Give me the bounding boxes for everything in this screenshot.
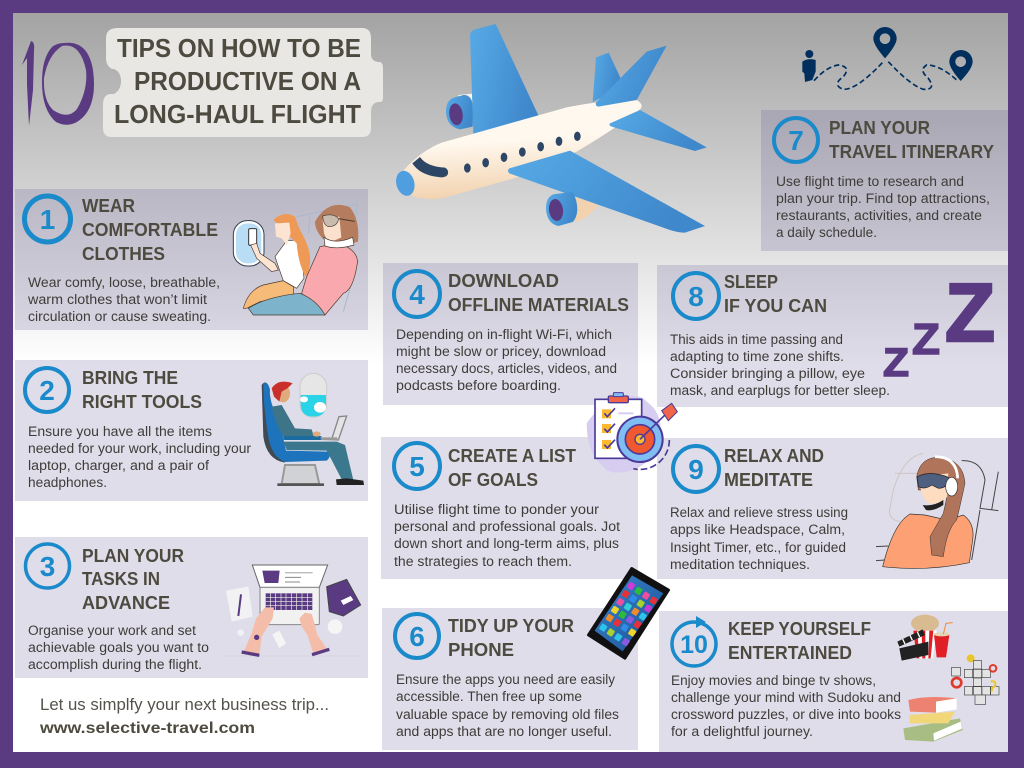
number badge 2: 2 <box>39 375 55 406</box>
heading: MEDITATE <box>724 469 813 490</box>
body text: Ensure the apps you need are easily <box>396 672 615 687</box>
number badge 9 <box>673 446 719 492</box>
heading: DOWNLOAD <box>448 270 559 291</box>
number badge 10 with arrow <box>672 616 716 666</box>
number badge 5: 5 <box>409 451 425 482</box>
number badge 1: 1 <box>40 204 55 235</box>
body text: podcasts before boarding. <box>396 378 561 393</box>
heading <box>448 615 574 660</box>
body text: personal and professional goals. Jot <box>394 519 620 534</box>
heading: KEEP YOURSELF <box>728 618 871 639</box>
panel: tip 7 plan your travel itinerary <box>761 110 1008 251</box>
number badge 6: 6 <box>409 621 425 652</box>
panel: tip 8 sleep if you can <box>657 265 1008 407</box>
body text: challenge your mind with Sudoku and <box>671 690 901 705</box>
numeral 10 <box>22 41 94 126</box>
footer call to action: www.selective-travel.com <box>39 720 255 737</box>
heading: PHONE <box>448 639 514 660</box>
heading: ENTERTAINED <box>728 642 852 663</box>
body text: mask, and earplugs for better sleep. <box>670 383 890 398</box>
panel: tip 6 tidy up your phone <box>382 608 638 750</box>
number badge 6 <box>395 614 439 658</box>
heading: BRING THE <box>82 367 178 388</box>
title bubble <box>103 28 383 137</box>
body text: plan your trip. Find top attractions, <box>776 191 990 206</box>
body text: achievable goals you want to <box>28 640 209 655</box>
heading: TASKS IN <box>82 568 160 589</box>
title: PRODUCTIVE ON A <box>134 66 361 96</box>
body text <box>670 332 890 398</box>
title <box>103 28 383 137</box>
illustration: movies, puzzles and books <box>897 615 999 742</box>
number badge 7: 7 <box>788 125 804 156</box>
panel: tip 3 plan your tasks in advance <box>15 537 368 678</box>
body text: Relax and relieve stress using <box>670 505 848 520</box>
body text: Enjoy movies and binge tv shows, <box>671 673 876 688</box>
body text: laptop, charger, and a pair of <box>28 458 209 473</box>
title: TIPS ON HOW TO BE <box>117 33 361 63</box>
footer call to action <box>39 695 329 737</box>
body text: necessary docs, articles, videos, and <box>396 361 617 376</box>
number badge 3 <box>26 544 70 588</box>
heading <box>724 271 827 316</box>
body text: Consider bringing a pillow, eye <box>670 366 865 381</box>
number badge 5 <box>394 443 440 489</box>
heading: PLAN YOUR <box>82 545 184 566</box>
body text: for a delightful journey. <box>671 724 813 739</box>
body text: down short and long-term aims, plus <box>394 536 619 551</box>
number badge 7 <box>774 118 818 162</box>
body text: a daily schedule. <box>776 225 877 240</box>
icon: ZZZ sleep letters: Z <box>945 266 995 359</box>
body text: Wear comfy, loose, breathable, <box>28 275 220 290</box>
illustration: two passengers by a window <box>233 204 358 315</box>
heading: COMFORTABLE <box>82 219 218 240</box>
body text <box>671 673 901 739</box>
heading: CREATE A LIST <box>448 445 577 466</box>
body text: restaurants, activities, and create <box>776 208 982 223</box>
heading <box>829 117 995 162</box>
icon: smartphone with app grid <box>588 568 669 658</box>
illustration: hands typing on a laptop <box>223 565 361 656</box>
icon: ZZZ sleep letters <box>883 266 995 385</box>
heading <box>82 367 202 412</box>
body text: Utilise flight time to ponder your <box>394 502 600 517</box>
panel: tip 5 create a list of goals <box>381 437 638 579</box>
heading <box>448 445 577 490</box>
heading <box>448 270 629 315</box>
number badge 8 <box>673 273 719 319</box>
heading: ADVANCE <box>82 592 170 613</box>
icon: checklist and target <box>587 393 677 473</box>
icon: route with map pins <box>802 27 973 89</box>
heading: CLOTHES <box>82 243 165 264</box>
body text: might be slow or pricey, download <box>396 344 606 359</box>
number badge 3: 3 <box>40 551 55 582</box>
title: LONG-HAUL FLIGHT <box>114 99 361 129</box>
body text: crossword puzzles, or dive into books <box>671 707 901 722</box>
body text: circulation or cause sweating. <box>28 309 211 324</box>
panel: tip 4 download offline materials <box>383 263 638 405</box>
body text: valuable space by removing old files <box>396 707 619 722</box>
illustration: man in airplane seat with laptop <box>262 373 364 486</box>
panel: tip 1 wear comfortable clothes <box>15 189 368 330</box>
number badge 9: 9 <box>688 454 704 485</box>
body text: Organise your work and set <box>28 623 196 638</box>
heading: TIDY UP YOUR <box>448 615 574 636</box>
panel: tip 2 bring the right tools <box>15 360 368 501</box>
body text: and apps that are no longer useful. <box>396 724 612 739</box>
heading: OFFLINE MATERIALS <box>448 294 629 315</box>
body text <box>396 327 617 393</box>
body text: Insight Timer, etc., for guided <box>670 540 846 555</box>
footer call to action: Let us simplfy your next business trip... <box>40 695 329 714</box>
body text: accessible. Then free up some <box>396 689 582 704</box>
body text <box>394 502 620 569</box>
heading: RELAX AND <box>724 445 824 466</box>
heading: WEAR <box>82 195 135 216</box>
body text: This aids in time passing and <box>670 332 843 347</box>
heading: SLEEP <box>724 271 778 292</box>
heading: PLAN YOUR <box>829 117 930 138</box>
body text: needed for your work, including your <box>28 441 252 456</box>
body text: Depending on in-flight Wi-Fi, which <box>396 327 612 342</box>
heading: TRAVEL ITINERARY <box>829 141 995 162</box>
icon: ZZZ sleep letters: Z <box>912 315 940 364</box>
number badge 8: 8 <box>688 281 704 312</box>
body text <box>27 275 220 324</box>
number badge 4 <box>394 271 440 317</box>
body text: apps like Headspace, Calm, <box>670 522 845 537</box>
illustration: woman with eye mask and headphones <box>876 453 998 568</box>
body text: the strategies to reach them. <box>394 554 572 569</box>
body text <box>396 672 619 739</box>
number badge 10 with arrow: 10 <box>680 631 708 659</box>
panel: tip 10 keep yourself entertained <box>659 611 1008 752</box>
body text: Use flight time to research and <box>776 174 964 189</box>
panel: tip 9 relax and meditate <box>657 438 1008 579</box>
heading <box>728 618 871 663</box>
heading <box>82 545 184 613</box>
number badge 1 <box>24 196 70 242</box>
icon: airplane <box>393 24 707 233</box>
number badge 2 <box>25 368 69 412</box>
body text <box>28 424 252 490</box>
body text: accomplish during the flight. <box>28 657 202 672</box>
body text <box>776 174 990 240</box>
heading <box>724 445 824 490</box>
body text <box>28 623 209 672</box>
body text: Ensure you have all the items <box>28 424 212 439</box>
heading <box>82 195 218 264</box>
number badge 4: 4 <box>409 279 425 310</box>
body text: adapting to time zone shifts. <box>670 349 844 364</box>
heading: IF YOU CAN <box>724 295 827 316</box>
body text: meditation techniques. <box>670 557 810 572</box>
heading: OF GOALS <box>448 469 538 490</box>
body text: warm clothes that won’t limit <box>27 292 207 307</box>
body text <box>670 505 848 572</box>
icon: ZZZ sleep letters: Z <box>883 341 909 385</box>
heading: RIGHT TOOLS <box>82 391 202 412</box>
body text: headphones. <box>28 475 107 490</box>
